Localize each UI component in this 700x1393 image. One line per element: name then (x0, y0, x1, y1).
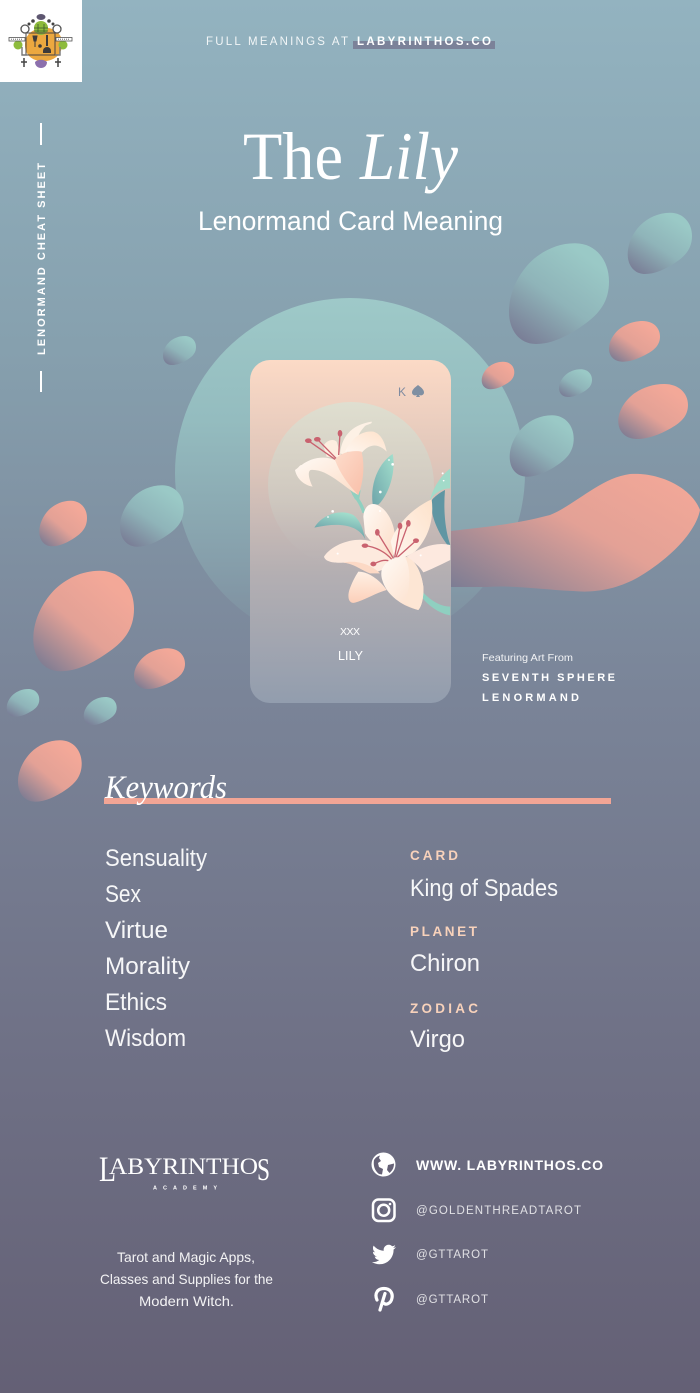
keywords heading: Keywords (104, 770, 227, 806)
labyrinthos logo: S (257, 1151, 270, 1187)
icon: instagram (373, 1200, 394, 1221)
keyword list: Morality (105, 953, 190, 980)
labyrinthos logo: ABYRINTHO (109, 1154, 258, 1179)
header link (206, 36, 495, 49)
card attributes: PLANET (410, 924, 478, 939)
labyrinthos logo: L (99, 1149, 116, 1189)
wave blob (440, 474, 700, 592)
labyrinthos logo (99, 1149, 270, 1192)
blobs: left cluster (7, 336, 196, 802)
card suit mark (398, 385, 424, 399)
card attributes: ZODIAC (410, 1001, 478, 1016)
card number: XXX (340, 626, 360, 638)
keywords heading (104, 770, 611, 806)
art credit: SEVENTH SPHERE (482, 672, 615, 684)
logo box (0, 0, 82, 82)
tagline: Classes and Supplies for the (100, 1271, 273, 1287)
keyword list: Sex (105, 881, 141, 908)
keyword list (105, 845, 207, 1052)
card name: LILY (338, 649, 364, 663)
blobs: right cluster (482, 213, 692, 477)
card attributes: Chiron (410, 950, 480, 977)
card (250, 360, 451, 703)
keyword list: Virtue (105, 917, 168, 944)
header link: LABYRINTHOS.CO (357, 36, 491, 48)
tagline (100, 1249, 273, 1309)
lily illustration (295, 422, 450, 615)
icon: pinterest (376, 1288, 392, 1310)
title: Lily (359, 118, 459, 194)
card attributes: Virgo (410, 1026, 465, 1053)
keyword list: Ethics (105, 989, 167, 1016)
tagline: Tarot and Magic Apps, (117, 1249, 255, 1265)
subtitle: Lenormand Card Meaning (198, 206, 503, 236)
icon: twitter (372, 1245, 396, 1264)
art credit: LENORMAND (482, 692, 579, 704)
tagline: Modern Witch. (139, 1293, 234, 1309)
card inner circle (268, 402, 434, 568)
header link: FULL MEANINGS AT (206, 36, 348, 48)
title: The (243, 118, 343, 194)
card attributes (410, 848, 558, 1053)
icon: globe (372, 1152, 396, 1176)
art credit (482, 652, 615, 704)
card attributes: King of Spades (410, 875, 558, 902)
card attributes: CARD (410, 848, 458, 863)
keyword list: Sensuality (105, 845, 207, 872)
instagram handle: @GOLDENTHREADTAROT (416, 1205, 581, 1217)
keyword list: Wisdom (105, 1025, 186, 1052)
pinterest handle: @GTTAROT (416, 1294, 488, 1306)
title (243, 118, 459, 194)
twitter handle: @GTTAROT (416, 1249, 488, 1261)
labyrinthos logo: ACADEMY (153, 1186, 217, 1192)
card suit mark: K (398, 385, 406, 399)
sidebar label: LENORMAND CHEAT SHEET (36, 163, 48, 355)
art credit: Featuring Art From (482, 652, 573, 664)
large background circle (175, 298, 525, 648)
website link: WWW. LABYRINTHOS.CO (416, 1157, 603, 1173)
